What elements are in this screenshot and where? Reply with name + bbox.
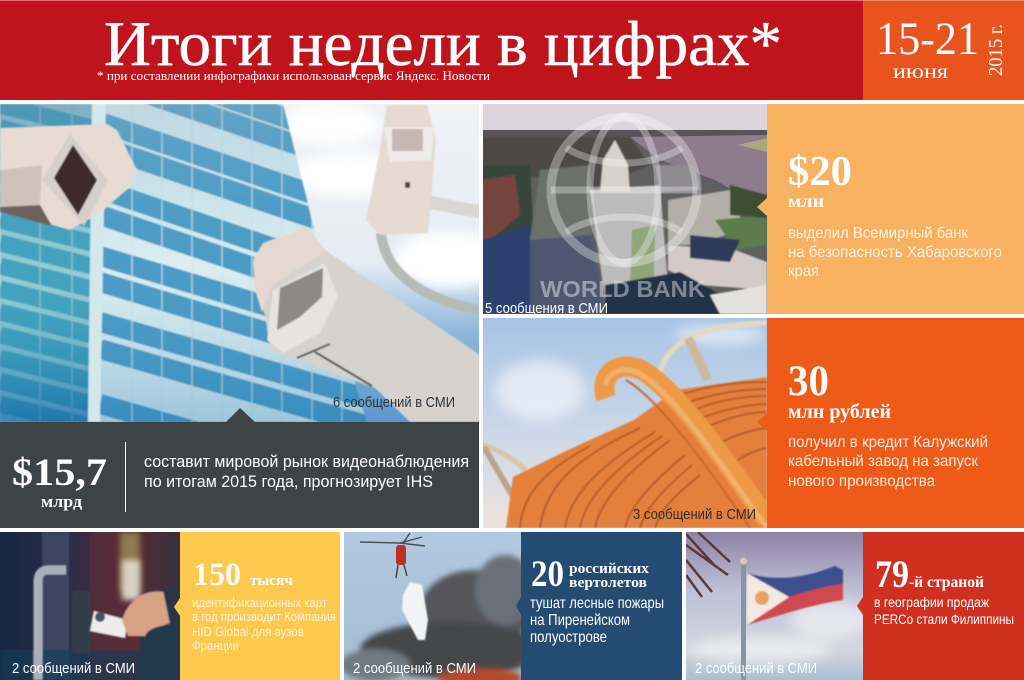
- palm leaves: [686, 532, 730, 597]
- panel: cable photo: [483, 318, 767, 528]
- source caption: 3 сообщений в СМИ: [633, 507, 756, 523]
- panel: market forecast: [0, 408, 479, 528]
- figure: 30: [788, 358, 829, 405]
- watermark: WORLD BANK: [540, 276, 705, 302]
- panel: cable plant text: [757, 318, 1024, 528]
- description: полуострове: [530, 629, 607, 646]
- panel: access card photo: [0, 532, 180, 680]
- description: получил в кредит Калужский: [788, 434, 988, 451]
- description: [530, 595, 664, 646]
- source caption: 2 сообщений в СМИ: [353, 661, 476, 677]
- panel: Philippines text: [857, 532, 1024, 680]
- unit: млрд: [41, 492, 82, 511]
- unit: млн: [788, 191, 824, 211]
- description: [144, 452, 469, 491]
- unit: российских: [569, 561, 650, 577]
- date block: [863, 0, 1024, 100]
- smoke: [340, 555, 540, 680]
- figure: $20: [788, 149, 852, 195]
- title: Итоги недели в цифрах*: [104, 9, 782, 79]
- card reader: [72, 591, 90, 653]
- helicopter: [360, 533, 425, 578]
- source caption: 2 сообщений в СМИ: [12, 661, 135, 677]
- figure: 79: [875, 553, 909, 596]
- description: края: [788, 263, 819, 280]
- cable coil: [506, 377, 767, 528]
- city blocks: [483, 137, 650, 190]
- panel: ID cards text: [174, 532, 340, 680]
- description: Франции: [192, 638, 239, 653]
- description: [788, 434, 988, 490]
- header bar: [0, 0, 863, 100]
- water drop: [402, 582, 428, 640]
- description: на Пиренейском: [530, 612, 630, 629]
- year: 2015 г.: [985, 24, 1007, 76]
- clouds: [287, 106, 479, 294]
- description: в год производит Компания: [192, 609, 336, 624]
- description: нового производства: [788, 473, 935, 490]
- unit: [569, 561, 650, 591]
- unit: тысяч: [250, 573, 294, 589]
- description: кабельный завод на запуск: [788, 453, 979, 470]
- description: [874, 594, 1014, 627]
- flag pole: [741, 563, 746, 680]
- camera left: [0, 124, 137, 230]
- unit: млн рублей: [788, 401, 891, 423]
- month: июня: [893, 61, 948, 83]
- unit: вертолетов: [569, 575, 647, 591]
- flag: [747, 566, 843, 625]
- footnote: * при составлении инфографики использован сервис Яндекс. Новости: [97, 68, 490, 83]
- camera top right: [366, 105, 480, 310]
- figure: $15,7: [12, 451, 107, 494]
- description: составит мировой рынок видеонаблюдения: [144, 452, 469, 471]
- panel: World Bank text: [757, 104, 1024, 314]
- World Bank logo: [551, 117, 697, 263]
- panel: helicopters text: [516, 532, 682, 680]
- description: выделил Всемирный банк: [788, 225, 969, 242]
- camera bottom right: [253, 227, 480, 422]
- description: тушат лесные пожары: [530, 595, 664, 612]
- description: идентификационных карт: [192, 595, 327, 610]
- source caption: 6 сообщений в СМИ: [333, 395, 455, 411]
- description: [788, 225, 1002, 280]
- glass building: [0, 104, 367, 422]
- spool frame: [659, 323, 767, 375]
- hand: [122, 591, 172, 636]
- river: [630, 135, 767, 198]
- source caption: 5 сообщения в СМИ: [485, 301, 608, 317]
- panel: video surveillance photo: [0, 104, 479, 422]
- card: [90, 611, 128, 638]
- description: [192, 595, 336, 653]
- description: HID Global для вузов: [192, 624, 304, 639]
- panel: flag photo: [686, 532, 870, 680]
- panel: helicopter photo: [344, 532, 521, 680]
- figure: 150: [193, 557, 241, 593]
- date range: 15-21: [876, 13, 979, 65]
- panel: Khabarovsk photo: [483, 104, 767, 317]
- description: по итогам 2015 года, прогнозирует IHS: [144, 472, 433, 491]
- figure: 20: [531, 554, 564, 595]
- description: на безопасность Хабаровского: [788, 244, 1002, 261]
- door handle: [38, 570, 66, 680]
- source caption: 2 сообщений в СМИ: [695, 661, 817, 677]
- unit: -й страной: [909, 574, 984, 591]
- fire: [438, 668, 522, 680]
- description: в географии продаж: [874, 594, 990, 610]
